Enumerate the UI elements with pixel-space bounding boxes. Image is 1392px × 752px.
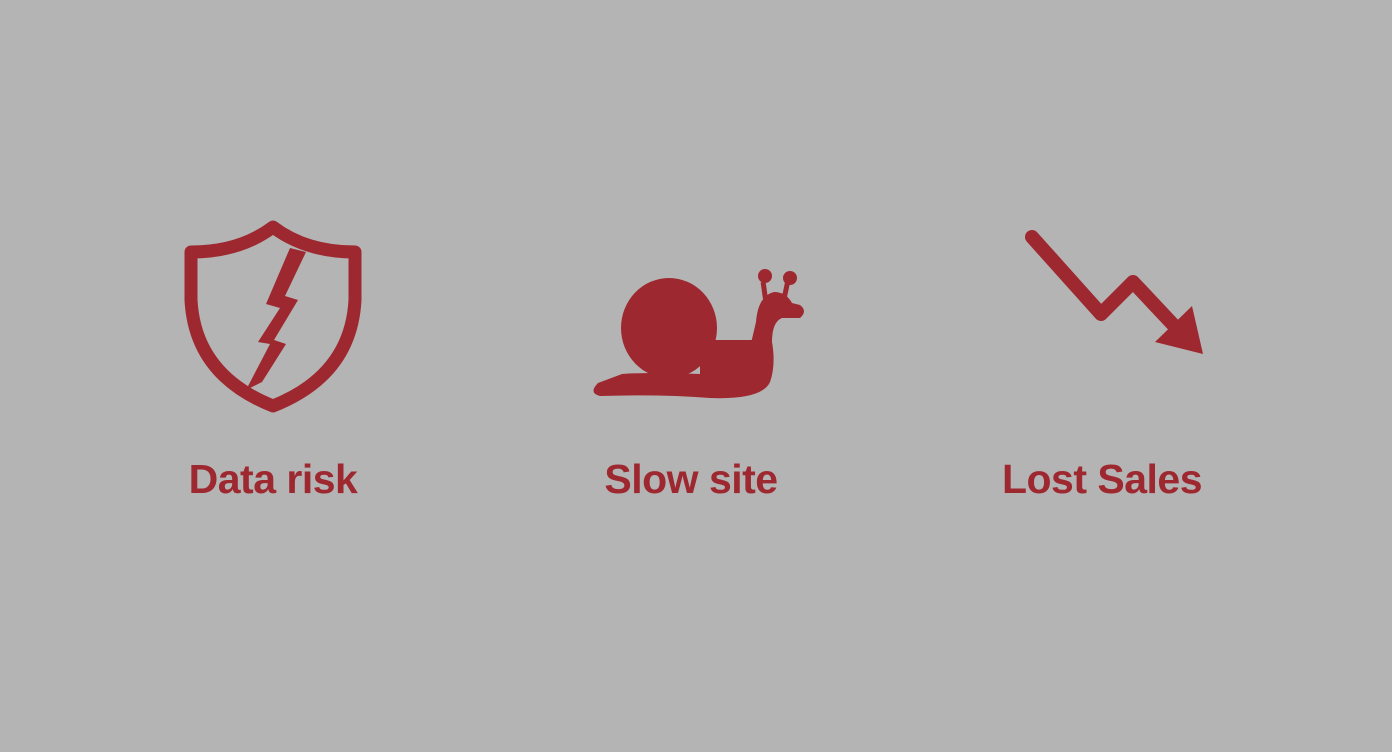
label: Data risk: Data risk — [189, 456, 357, 502]
icon: falling arrow — [1032, 237, 1203, 354]
label: Lost Sales: Lost Sales — [1002, 456, 1202, 502]
icon: broken shield — [191, 227, 355, 406]
icon: snail — [593, 269, 804, 398]
label: Slow site: Slow site — [604, 456, 778, 502]
